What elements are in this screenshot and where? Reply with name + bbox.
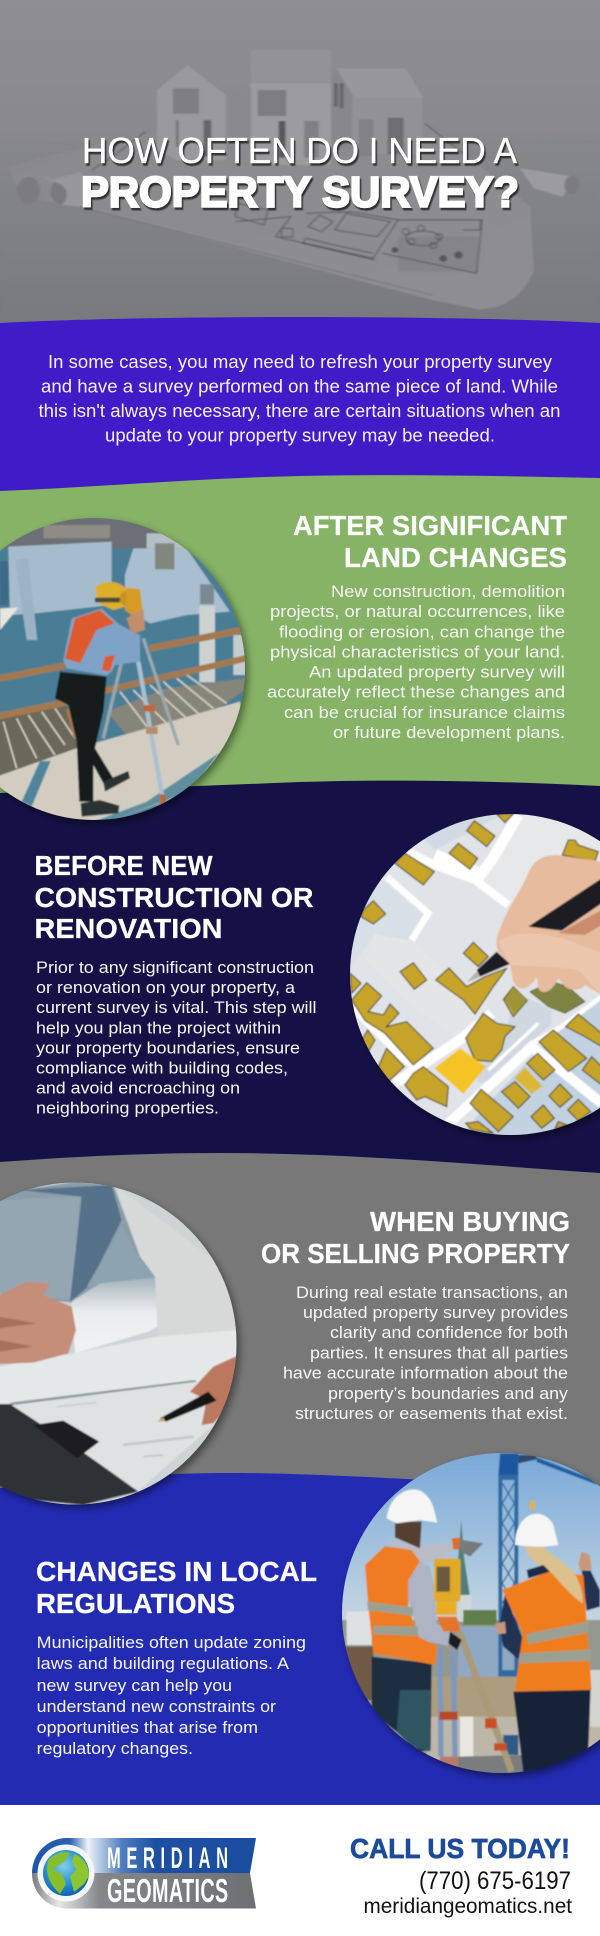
title: PROPERTY SURVEY? [81, 168, 519, 216]
roads [353, 815, 600, 1130]
body text: structures or easements that exist. [295, 1405, 568, 1423]
rails [0, 630, 246, 738]
highlighted parcels [434, 1048, 542, 1094]
title: HOW OFTEN DO I NEED A [82, 130, 517, 171]
right model house [331, 68, 423, 156]
background city [3, 518, 160, 549]
body text: have accurate information about the [283, 1365, 568, 1383]
heading: WHEN BUYING [370, 1206, 570, 1237]
intro text: and have a survey performed on the same piece of land. While [41, 376, 558, 396]
body text: physical characteristics of your land. [270, 644, 565, 662]
body text: current survey is vital. This step will [36, 999, 316, 1017]
body text: opportunities that arise from [37, 1719, 258, 1737]
floor plan lines [80, 123, 482, 295]
body text: understand new constraints or [37, 1698, 277, 1716]
body text: or future development plans. [333, 724, 565, 742]
illustration: blueprint with model houses [0, 50, 600, 320]
hero panel [0, 0, 600, 330]
distant buildings [340, 1620, 600, 1780]
body text: neighboring properties. [36, 1100, 219, 1118]
photo circle: two surveyors in orange vests [340, 1450, 600, 1780]
heading: CONSTRUCTION OR [34, 882, 313, 913]
body text: new survey can help you [37, 1677, 232, 1695]
intro text: update to your property survey may be needed. [105, 424, 495, 446]
body text: help you plan the project within [36, 1020, 281, 1038]
body text: your property boundaries, ensure [36, 1040, 300, 1058]
contact block [350, 1833, 572, 1918]
contact block: (770) 675-6197 [419, 1867, 571, 1895]
body text: An updated property survey will [309, 664, 565, 682]
body text [36, 959, 316, 1118]
heading [36, 1556, 317, 1619]
logo: Meridian Geomatics [32, 1838, 256, 1909]
body text: clarity and confidence for both [330, 1324, 568, 1342]
middle model house [251, 50, 331, 165]
surveyor figure [55, 582, 145, 817]
panel: after significant land changes [0, 475, 600, 1805]
heading: BEFORE NEW [34, 850, 213, 881]
table [0, 1330, 240, 1404]
hand [497, 855, 600, 995]
body text: parties. It ensures that all parties [310, 1344, 568, 1362]
logo wordmark: GEOMATICS [107, 1872, 228, 1909]
body text: updated property survey provides [303, 1304, 568, 1322]
heading [34, 850, 313, 944]
intro text: this isn't always necessary, there are certain situations when an [38, 400, 560, 421]
hand with pen [190, 1356, 237, 1425]
clipboard clamp [33, 1421, 99, 1458]
crane [498, 1453, 597, 1677]
yellow parcels [350, 814, 600, 1133]
heading: OR SELLING PROPERTY [261, 1238, 570, 1269]
paper [12, 1382, 215, 1491]
heading: REGULATIONS [36, 1588, 235, 1619]
intro text: In some cases, you may need to refresh your property survey [48, 351, 553, 372]
title [81, 130, 519, 216]
concrete walls [8, 542, 112, 615]
left surveyor [365, 1490, 483, 1752]
body text [37, 1634, 306, 1758]
icon: globe [43, 1850, 89, 1896]
instrument on tripod [434, 1558, 512, 1772]
body text: projects, or natural occurrences, like [270, 603, 565, 621]
light plots [478, 813, 600, 907]
sweater [2, 1182, 156, 1304]
body text [267, 583, 565, 742]
panel: intro [0, 317, 600, 1805]
body text [283, 1284, 569, 1423]
heading: AFTER SIGNIFICANT [293, 510, 567, 541]
ground [0, 702, 247, 825]
footer band [0, 1805, 600, 1936]
body text: compliance with building codes, [36, 1060, 288, 1078]
heading [261, 1206, 570, 1269]
rebar fields [0, 705, 78, 778]
pen [528, 878, 600, 931]
left paper scroll [17, 172, 82, 207]
body text: flooding or erosion, can change the [279, 624, 565, 642]
photo circle: hand with pen on cadastral map [345, 810, 600, 1143]
left model house [157, 65, 251, 160]
right paper scroll [520, 168, 580, 197]
panel: changes in local regulations [0, 1473, 600, 1805]
body text: property’s boundaries and any [328, 1385, 569, 1403]
body text: laws and building regulations. A [37, 1655, 289, 1673]
panel: before new construction or renovation [0, 781, 600, 1805]
body text: and avoid encroaching on [36, 1080, 240, 1098]
body text: Prior to any significant construction [36, 959, 314, 977]
photo circle: surveyor at construction site [0, 512, 257, 832]
clasped hands [0, 1282, 76, 1364]
body text: or renovation on your property, a [36, 979, 296, 997]
body text: regulatory changes. [37, 1740, 193, 1758]
heading [293, 510, 567, 573]
body text: can be crucial for insurance claims [284, 704, 565, 722]
body text: During real estate transactions, an [296, 1284, 568, 1302]
heading: RENOVATION [34, 913, 222, 944]
body text: New construction, demolition [331, 583, 565, 601]
tripod [103, 638, 178, 802]
logo wordmark: MERIDIAN [107, 1842, 228, 1875]
logo wordmark [107, 1842, 228, 1909]
heading: CHANGES IN LOCAL [36, 1556, 317, 1587]
clipboard [0, 1404, 138, 1505]
heading: LAND CHANGES [344, 542, 567, 573]
blueprint sheet [8, 118, 534, 309]
parcels shaded by hand [530, 982, 585, 1013]
contact block: meridiangeomatics.net [364, 1895, 572, 1918]
photo circle: hands signing paper on clipboard [0, 1178, 242, 1512]
body text: Municipalities often update zoning [37, 1634, 306, 1652]
intro text [38, 351, 560, 446]
body text: accurately reflect these changes and [267, 684, 565, 702]
contact block: CALL US TODAY! [350, 1833, 570, 1864]
right surveyor [495, 1501, 600, 1773]
panel: when buying or selling property [0, 1153, 600, 1805]
